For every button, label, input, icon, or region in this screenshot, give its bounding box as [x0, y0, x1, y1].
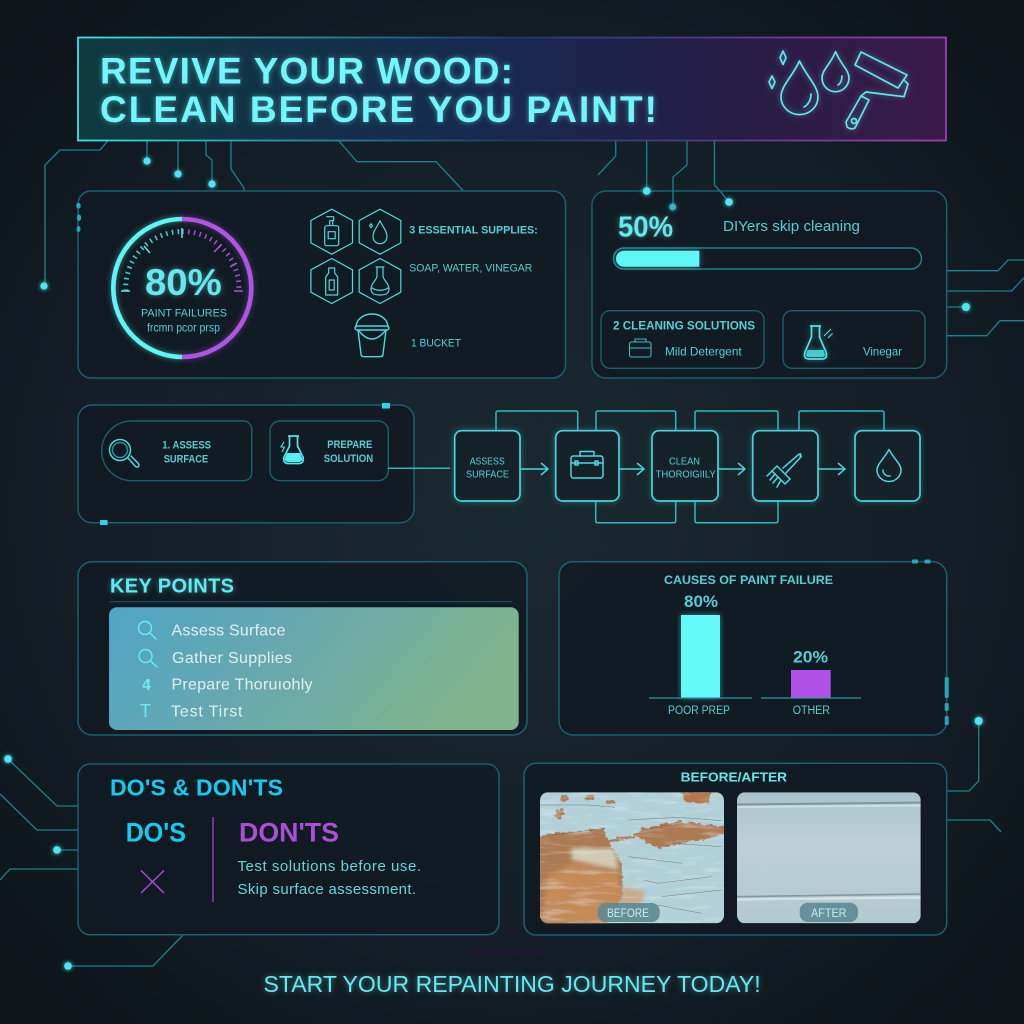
faint caption: cleaning broom: [473, 946, 551, 958]
don'ts column: DON'TS: [239, 818, 339, 848]
key points list: T: [140, 701, 151, 721]
call to action: START YOUR REPAINTING JOURNEY TODAY!: [264, 971, 761, 997]
icon: magnifier: [110, 440, 139, 467]
panel markers: [912, 560, 949, 725]
icon: flask: [804, 326, 832, 359]
progress bar: [614, 248, 922, 269]
bar: poor prep: [649, 592, 752, 717]
flow box: assess surface: ASSESS: [470, 456, 505, 467]
gauge: PAINT FAILURES: [141, 308, 227, 320]
gauge: 80%: [145, 262, 222, 303]
label: after: AFTER: [811, 908, 846, 920]
bar: other: 20%: [793, 648, 828, 667]
step: assess surface: 1. ASSESS: [162, 440, 211, 452]
panel: bar chart causes of paint failure: [559, 560, 949, 735]
icon: cross: [141, 870, 164, 893]
title: CLEAN BEFORE YOU PAINT!: [100, 89, 657, 130]
don'ts column: Test solutions before use.: [238, 858, 421, 875]
gauge: frcmn pcor prsp: [147, 320, 220, 334]
hexagon icon: soap: [311, 209, 352, 254]
bar: other: OTHER: [793, 705, 830, 717]
photo: clean painted wood: [737, 792, 921, 923]
label: after: [800, 903, 858, 922]
heading: BEFORE/AFTER: [681, 770, 788, 785]
panel: paint failure gauge and supplies: [76, 191, 566, 378]
flow box: water drop: [855, 431, 920, 501]
step: assess surface: [102, 421, 252, 481]
key points list: Test Tirst: [171, 704, 243, 721]
bar: poor prep: POOR PREP: [668, 705, 730, 717]
flow arrows: [520, 463, 845, 475]
icon: briefcase: [630, 339, 651, 357]
icon: flask with bolt: [281, 436, 303, 464]
don'ts column: [238, 818, 421, 898]
key points list: Gather Supplies: [172, 650, 292, 667]
box: cleaning solutions: 2 CLEANING SOLUTIONS: [613, 319, 755, 333]
supplies text: [409, 224, 538, 350]
hexagon icon: flask: [359, 258, 401, 304]
process flow: [388, 411, 920, 523]
flow box: clean thoroughly: [652, 431, 718, 501]
title banner: [78, 38, 946, 140]
box: vinegar: [783, 311, 925, 368]
step: assess surface: SURFACE: [164, 454, 208, 466]
gauge: [113, 219, 251, 357]
flow box: brush: [753, 431, 818, 501]
panel edge markers: [76, 203, 81, 232]
panel: do's and don'ts: [78, 764, 499, 935]
do's column: [126, 818, 186, 893]
chart title: CAUSES OF PAINT FAILURE: [664, 573, 833, 587]
supplies text: SOAP, WATER, VINEGAR: [409, 262, 532, 274]
flow box: assess surface: SURFACE: [466, 470, 509, 481]
panel: steps: [78, 403, 414, 525]
trace ends over panel: [643, 187, 733, 210]
panel: key points: [78, 562, 527, 735]
step: prepare solution: SOLUTION: [324, 453, 373, 465]
panel markers: [100, 403, 390, 525]
supplies text: 3 ESSENTIAL SUPPLIES:: [409, 224, 538, 236]
box: vinegar: Vinegar: [863, 344, 902, 358]
stat: 50%: 50%: [618, 212, 673, 244]
flow box: clean thoroughly: THOROIGIILY: [656, 470, 716, 481]
panel: before and after: [524, 763, 947, 935]
do's column: DO'S: [126, 818, 186, 848]
icon: drops and paint roller: [769, 51, 908, 129]
don'ts column: Skip surface assessment.: [238, 881, 416, 898]
supplies text: 1 BUCKET: [411, 338, 461, 350]
hexagon icon: bottle: [311, 258, 352, 304]
step: prepare solution: PREPARE: [327, 439, 372, 451]
photo: peeling paint: [535, 792, 728, 930]
key points list: Prepare Thoruıohly: [172, 677, 312, 694]
label: before: [598, 903, 660, 922]
bar: other: [761, 648, 861, 717]
flow box: assess surface: [455, 431, 520, 501]
title: [100, 50, 657, 130]
box: cleaning solutions: Mild Detergent: [665, 344, 742, 358]
box: cleaning solutions: [601, 311, 764, 368]
panel: 50 percent skip cleaning: [592, 187, 947, 378]
step: prepare solution: [270, 421, 388, 481]
key points list: Assess Surface: [172, 623, 286, 640]
icon: bucket: [355, 314, 389, 357]
hexagon icon: water: [359, 209, 401, 254]
bar: poor prep: 80%: [684, 592, 718, 611]
heading: KEY POINTS: [110, 576, 234, 598]
flow box: clean thoroughly: CLEAN: [669, 456, 700, 467]
label: before: BEFORE: [607, 908, 649, 920]
stat label: DIYers skip cleaning: [723, 218, 860, 235]
title: REVIVE YOUR WOOD:: [100, 50, 513, 91]
key points list: 4: [142, 677, 151, 694]
key points list: [109, 607, 519, 730]
connectors: [388, 411, 884, 523]
heading: DO'S & DON'TS: [110, 775, 283, 801]
flow box: toolbox: [556, 431, 619, 501]
